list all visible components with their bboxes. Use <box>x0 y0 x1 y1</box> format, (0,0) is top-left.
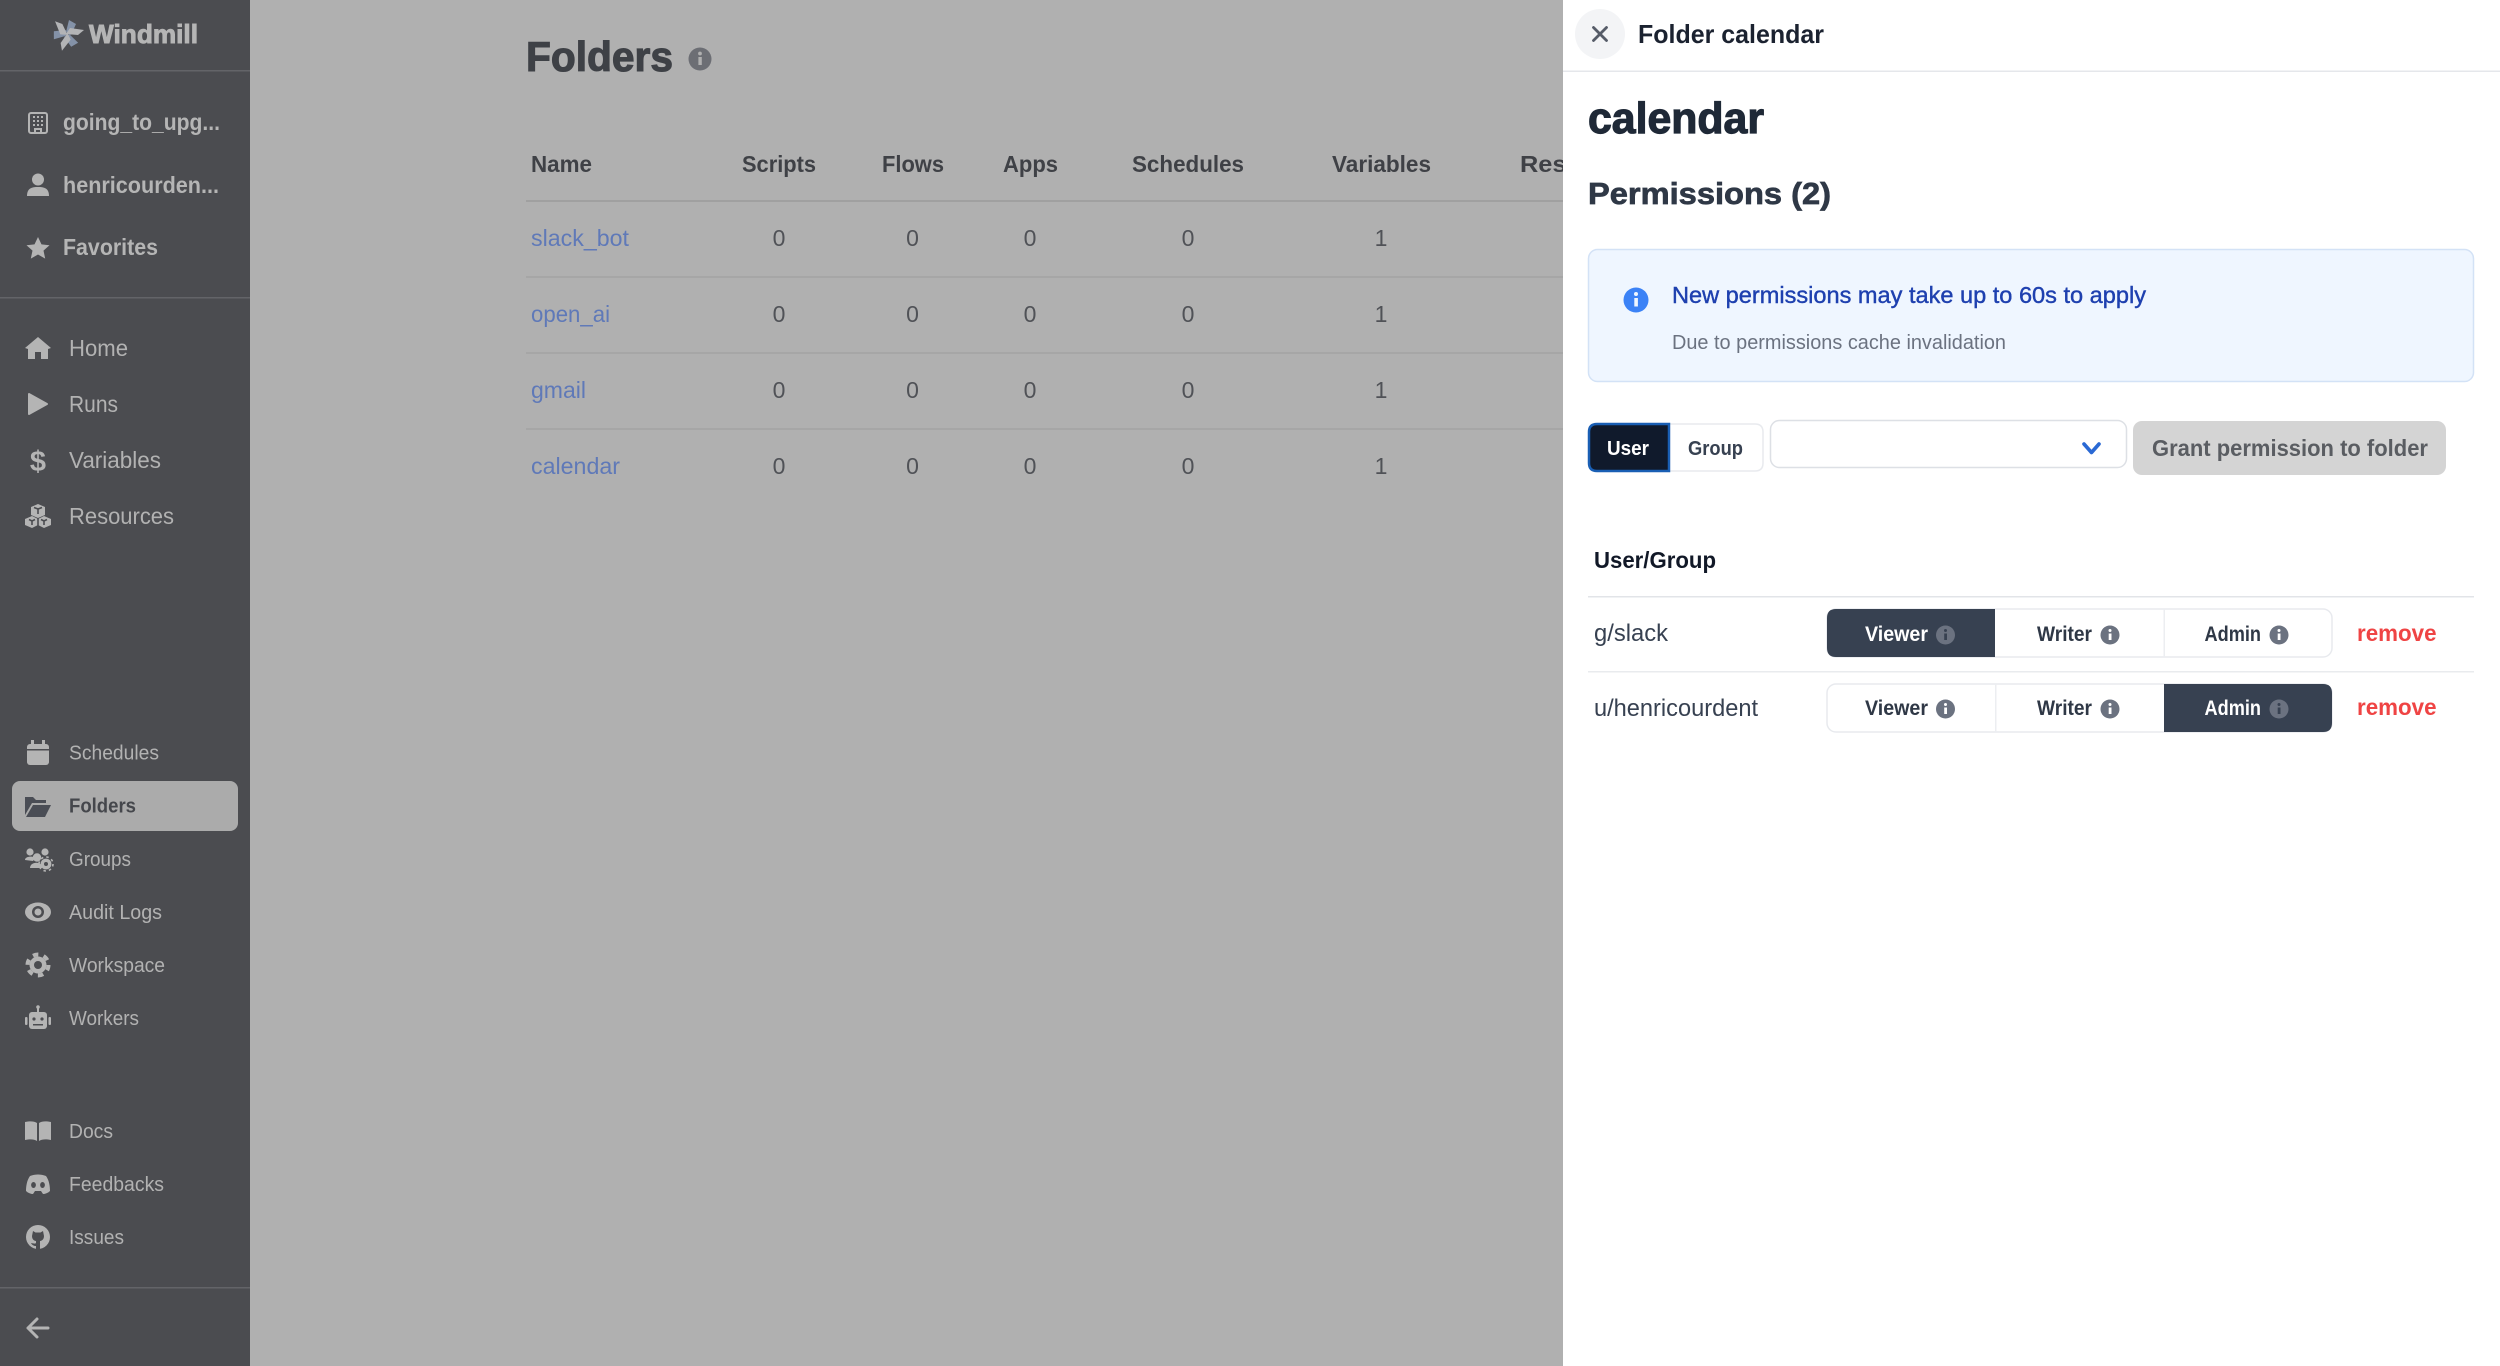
row: gmail: 1 <box>1375 377 1387 403</box>
nav: schedules: Schedules <box>69 742 159 764</box>
nav: issues: Issues <box>69 1227 124 1249</box>
nav: folders (active): Folders <box>69 796 136 818</box>
row: u/henricourdent: u/henricourdent <box>1594 695 1758 722</box>
nav: feedbacks <box>26 1174 164 1196</box>
nav: home <box>25 335 128 361</box>
nav: audit logs <box>25 902 162 924</box>
row: gmail: gmail <box>531 377 586 403</box>
nav: variables <box>30 446 161 478</box>
nav: schedules <box>27 740 159 765</box>
panel: sidebar <box>0 0 250 1366</box>
icon: dollar: $ <box>30 446 46 478</box>
row: gmail: 0 <box>773 377 785 403</box>
alert: permissions delay <box>1588 250 2474 382</box>
row: slack_bot: 1 <box>1375 225 1387 251</box>
table header: Reso <box>1520 151 1582 177</box>
row: u/henricourdent <box>1594 684 2436 732</box>
icon: folders info <box>688 48 712 70</box>
nav: docs <box>25 1121 113 1143</box>
toggle: role <box>1827 684 2332 732</box>
icon: book <box>25 1121 51 1141</box>
row: gmail: 0 <box>906 377 919 403</box>
toggle: role: Viewer <box>1865 697 1928 720</box>
button: close <box>1575 9 1625 59</box>
table header: Variables <box>1332 151 1431 177</box>
row: slack_bot: 0 <box>1024 225 1036 251</box>
heading: Folders: Folders <box>526 33 673 80</box>
icon: eye <box>25 902 51 922</box>
row: calendar: 0 <box>906 453 919 479</box>
icon: boxes <box>25 504 51 528</box>
row: open_ai <box>531 301 1387 327</box>
nav: groups: Groups <box>69 849 131 871</box>
nav: favorites: Favorites <box>63 234 158 260</box>
row: open_ai: 0 <box>906 301 919 327</box>
row: calendar: calendar <box>531 453 620 479</box>
icon: chevron <box>2084 444 2099 452</box>
row: slack_bot <box>531 225 1387 251</box>
table header: Flows <box>882 151 944 177</box>
table: permissions <box>1588 547 2474 732</box>
alert title: New permissions may take up to 60s to apply <box>1672 282 2147 308</box>
row: calendar: 0 <box>773 453 785 479</box>
icon: calendar <box>27 740 49 765</box>
nav: home: Home <box>69 335 128 361</box>
row: g/slack: g/slack <box>1594 620 1669 647</box>
icon: home <box>25 337 51 359</box>
row: calendar: 0 <box>1182 453 1194 479</box>
logo text: Windmill <box>89 19 198 49</box>
nav: resources: Resources <box>69 503 174 529</box>
nav: runs: Runs <box>69 391 118 417</box>
button: grant permission: Grant permission to folder <box>2152 435 2428 461</box>
nav: groups <box>25 848 131 871</box>
table header: Schedules <box>1132 151 1244 177</box>
nav: issues <box>26 1225 124 1249</box>
icon: gear <box>28 954 48 976</box>
toggle: user or group: Group <box>1688 438 1743 460</box>
nav: folders (active) <box>12 781 238 831</box>
row: slack_bot: 0 <box>773 225 785 251</box>
toggle: role: Writer <box>2037 623 2092 646</box>
nav: workspace <box>28 954 165 977</box>
row: open_ai: 0 <box>1024 301 1036 327</box>
icon: building <box>29 113 47 133</box>
icon: windmill logo <box>50 19 84 52</box>
icon: groups <box>25 848 53 871</box>
icon: collapse arrow <box>28 1319 48 1337</box>
alert body: Due to permissions cache invalidation <box>1672 332 2006 354</box>
table header: User/Group <box>1594 547 1716 573</box>
row: open_ai: 0 <box>1182 301 1194 327</box>
nav: workers <box>25 1005 139 1030</box>
table header: Apps <box>1003 151 1058 177</box>
row: slack_bot: 0 <box>1182 225 1194 251</box>
nav: favorites <box>26 234 158 260</box>
nav: docs: Docs <box>69 1121 113 1143</box>
row: slack_bot: slack_bot <box>531 225 630 251</box>
row: gmail <box>531 377 1387 403</box>
table header: Name <box>531 151 592 177</box>
button: grant permission <box>2133 421 2446 475</box>
row: gmail: 0 <box>1024 377 1036 403</box>
row: open_ai: open_ai <box>531 301 610 327</box>
toggle: role: Viewer <box>1865 623 1928 646</box>
row: g/slack: remove <box>2357 620 2436 646</box>
panel: folders page <box>526 33 1582 479</box>
icon: discord <box>26 1174 50 1194</box>
nav: workspace selector: going_to_upg... <box>63 109 220 135</box>
table header: Scripts <box>742 151 816 177</box>
toggle: user or group: User <box>1607 438 1649 460</box>
nav: user: henricourden... <box>63 172 219 198</box>
nav: runs <box>29 391 118 417</box>
heading: calendar: calendar <box>1588 94 1764 143</box>
nav: workers: Workers <box>69 1008 139 1030</box>
row: slack_bot: 0 <box>906 225 919 251</box>
icon: alert info <box>1624 288 1648 312</box>
icon: folder open <box>25 797 51 817</box>
nav: feedbacks: Feedbacks <box>69 1174 164 1196</box>
row: calendar: 0 <box>1024 453 1036 479</box>
row: open_ai: 1 <box>1375 301 1387 327</box>
nav: workspace: Workspace <box>69 955 165 977</box>
row: open_ai: 0 <box>773 301 785 327</box>
select: user <box>1770 420 2126 468</box>
toggle: role <box>1827 609 2332 657</box>
row: gmail: 0 <box>1182 377 1194 403</box>
row: g/slack <box>1594 609 2436 657</box>
row: calendar: 1 <box>1375 453 1387 479</box>
nav: resources <box>25 503 174 529</box>
toggle: user or group <box>1589 424 1763 471</box>
icon: github <box>26 1225 50 1249</box>
nav: variables: Variables <box>69 447 161 473</box>
table: folders <box>526 151 1582 479</box>
row: u/henricourdent: remove <box>2357 694 2436 720</box>
toggle: role: Admin <box>2204 697 2261 720</box>
toggle: role: Admin <box>2204 623 2261 646</box>
toggle: role: Writer <box>2037 697 2092 720</box>
icon: star <box>26 237 50 259</box>
heading: permissions: Permissions (2) <box>1588 176 1831 211</box>
nav: audit logs: Audit Logs <box>69 902 162 924</box>
icon: user <box>27 174 49 196</box>
panel: folder calendar drawer <box>1563 0 2500 1366</box>
row: calendar <box>531 453 1387 479</box>
icon: robot <box>25 1005 51 1029</box>
icon: play <box>29 394 47 414</box>
drawer title: Folder calendar <box>1638 19 1824 49</box>
table header <box>531 151 1582 177</box>
